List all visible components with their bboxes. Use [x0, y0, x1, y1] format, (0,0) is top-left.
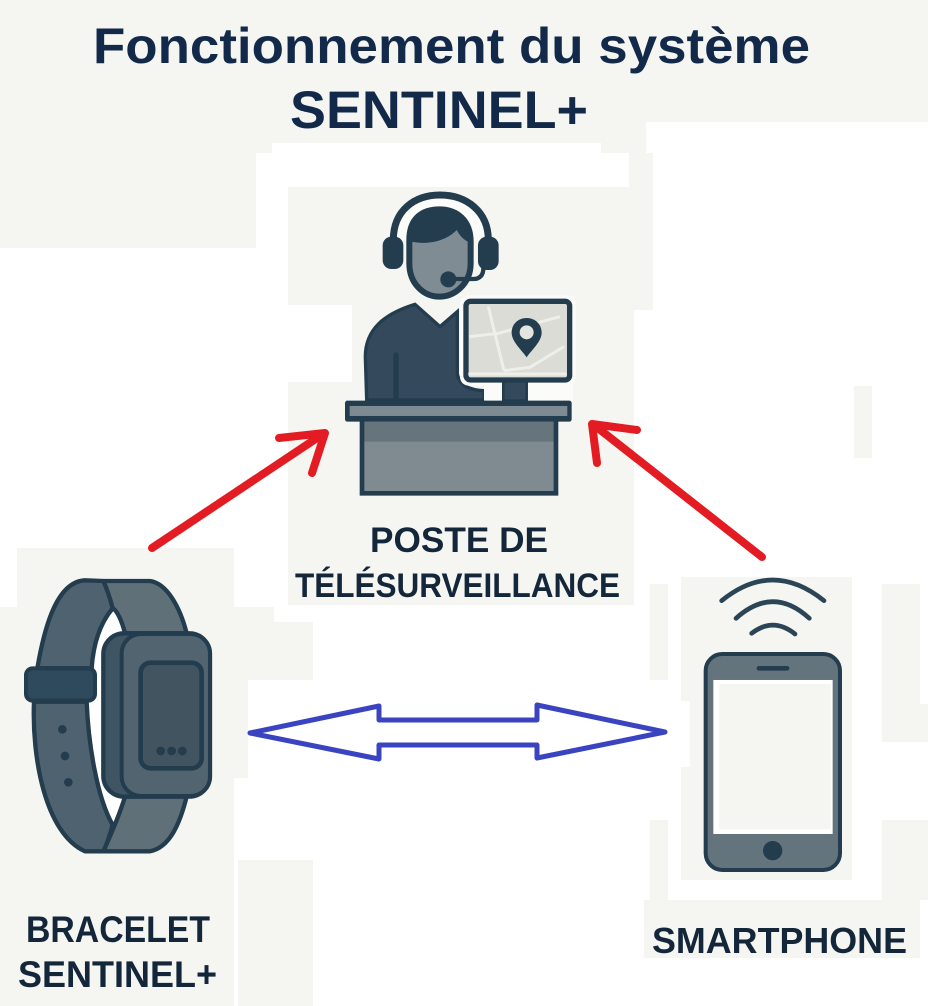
icon: smartphone with signal waves	[706, 580, 840, 870]
signal waves	[722, 580, 824, 634]
arrow: two-way link bracelet and smartphone	[250, 705, 665, 759]
hole in band	[87, 608, 125, 825]
monitor with map	[460, 295, 576, 401]
label: bracelet	[18, 909, 217, 995]
icon: operator at monitoring desk	[345, 195, 576, 493]
headset ear cups and microphone	[383, 237, 499, 287]
label: monitoring station: TÉLÉSURVEILLANCE	[295, 567, 620, 605]
label: bracelet: BRACELET	[26, 909, 210, 950]
title: SENTINEL+	[290, 81, 588, 140]
label: smartphone: SMARTPHONE	[652, 920, 907, 961]
icon: bracelet	[26, 580, 210, 851]
upper and lower band, far side	[103, 581, 187, 851]
desk	[345, 401, 572, 493]
label: monitoring station	[295, 521, 620, 605]
phone body	[706, 654, 840, 870]
phone screen	[713, 680, 833, 834]
home button	[763, 841, 782, 860]
label: monitoring station: POSTE DE	[370, 521, 548, 560]
speaker	[757, 666, 789, 671]
arrow: bracelet to monitoring station	[152, 433, 325, 548]
title: Fonctionnement du système	[93, 18, 810, 74]
tracker case	[103, 633, 210, 797]
label: bracelet: SENTINEL+	[18, 954, 217, 995]
band, near side	[34, 580, 113, 851]
headset band	[393, 195, 488, 240]
operator torso	[365, 304, 484, 400]
operator head	[409, 209, 471, 297]
title	[93, 18, 810, 140]
strap holes	[58, 725, 73, 787]
arrow: smartphone to monitoring station	[592, 424, 762, 557]
clasp	[26, 668, 95, 701]
